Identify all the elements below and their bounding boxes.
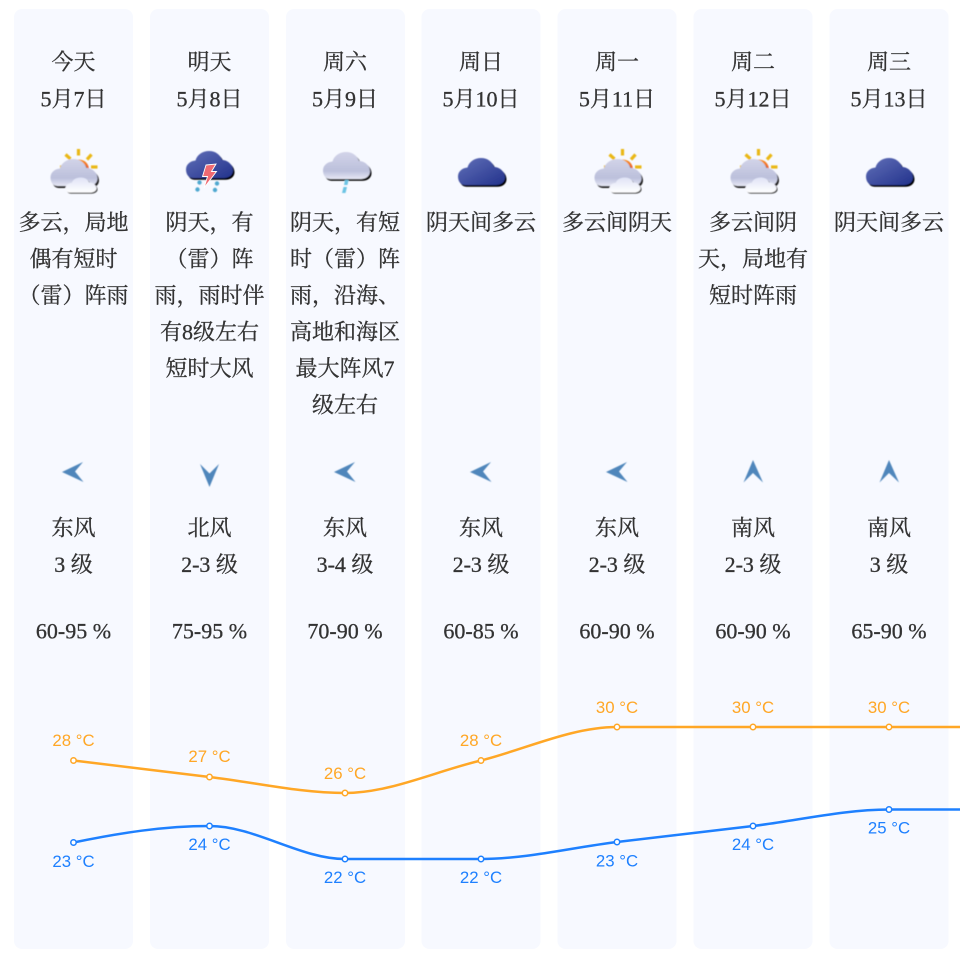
chart: low temperature line: 22 °C bbox=[324, 868, 366, 887]
weather description: 周六: 雨，沿海、 bbox=[290, 283, 400, 309]
icon: thunder shower bbox=[186, 151, 234, 192]
chart: low temperature line: 22 °C bbox=[460, 868, 502, 887]
chart: high temperature line: 28 °C bbox=[52, 731, 95, 750]
chart: high temperature line: 27 °C bbox=[188, 747, 231, 766]
wind arrow: north, day 2 bbox=[200, 464, 219, 487]
weather description: 周二 bbox=[698, 210, 808, 308]
humidity: 今天: 60-95 % bbox=[36, 618, 111, 644]
day heading: 周二 bbox=[714, 50, 792, 112]
wind: 周日 bbox=[453, 516, 509, 577]
wind: 明天 bbox=[181, 516, 238, 577]
day heading: 周一: 周一 bbox=[595, 50, 639, 74]
day heading: 周六 bbox=[312, 50, 378, 112]
humidity: 周一: 60-90 % bbox=[579, 618, 655, 644]
day heading: 明天 bbox=[176, 50, 243, 112]
chart: high temperature line: 26 °C bbox=[324, 764, 366, 783]
weather description: 明天: 阴天，有 bbox=[165, 210, 254, 236]
wind: 周一 bbox=[589, 516, 645, 577]
icon: overcast, day 7 bbox=[866, 158, 914, 187]
day heading: 周二: 5月12日 bbox=[714, 86, 792, 112]
weather description: 周一: 多云间阴天 bbox=[562, 210, 672, 235]
weather description: 明天: （雷）阵 bbox=[165, 246, 254, 272]
wind: 明天: 北风 bbox=[187, 516, 232, 540]
panel: 周一 bbox=[558, 9, 676, 949]
weather description: 周六: 时（雷）阵 bbox=[290, 246, 400, 272]
wind arrow: east, day 3 bbox=[334, 462, 356, 482]
weather description: 周二: 短时阵雨 bbox=[709, 283, 797, 308]
day heading: 明天: 5月8日 bbox=[176, 86, 243, 112]
chart: low temperature line: 23 °C bbox=[596, 851, 638, 870]
weather description: 明天: 短时大风 bbox=[165, 356, 254, 381]
weather description: 今天: 多云，局地 bbox=[18, 210, 129, 236]
panel: 周三 bbox=[830, 9, 948, 949]
weather description: 周三: 阴天间多云 bbox=[834, 210, 944, 235]
wind: 周一: 东风 bbox=[595, 516, 639, 540]
humidity: 周二: 60-90 % bbox=[715, 618, 791, 644]
panel: 周六 bbox=[286, 9, 405, 949]
wind: 周六: 3-4 级 bbox=[317, 552, 373, 577]
day heading: 今天: 5月7日 bbox=[40, 86, 107, 112]
weather description: 周二: 多云间阴 bbox=[709, 210, 797, 235]
weather description: 今天 bbox=[18, 210, 129, 308]
day heading: 周六: 5月9日 bbox=[312, 86, 378, 112]
wind: 今天: 3 级 bbox=[54, 552, 93, 577]
wind: 周三: 南风 bbox=[867, 516, 911, 540]
icon: partly cloudy, day 6 bbox=[730, 149, 779, 194]
wind: 周三: 3 级 bbox=[870, 552, 908, 577]
panel: 明天 bbox=[150, 9, 269, 949]
weather description: 周二: 天，局地有 bbox=[698, 246, 808, 272]
wind arrow: east, day 1 bbox=[62, 462, 84, 482]
day heading: 周一: 5月11日 bbox=[579, 86, 655, 112]
wind arrow: east, day 4 bbox=[470, 462, 492, 482]
chart: low temperature line bbox=[52, 807, 960, 887]
weather description: 周六: 级左右 bbox=[312, 392, 378, 418]
wind: 今天 bbox=[51, 516, 96, 577]
day heading: 周三 bbox=[850, 50, 928, 112]
chart: high temperature line: 30 °C bbox=[732, 698, 774, 717]
day heading: 周六: 周六 bbox=[323, 50, 368, 74]
chart: low temperature line: 25 °C bbox=[868, 818, 910, 837]
weather description: 周日: 阴天间多云 bbox=[426, 210, 536, 235]
weather description: 周六 bbox=[290, 210, 400, 418]
day heading: 周三: 5月13日 bbox=[850, 86, 928, 112]
humidity: 周日: 60-85 % bbox=[443, 618, 519, 644]
weather description: 周六: 高地和海区 bbox=[290, 320, 400, 344]
panel: 今天 bbox=[14, 9, 133, 949]
icon: partly cloudy, day 1 bbox=[50, 149, 99, 194]
day heading: 今天 bbox=[40, 50, 107, 112]
weather description: 明天 bbox=[154, 210, 265, 381]
day heading: 周一 bbox=[579, 50, 655, 112]
day heading: 周三: 周三 bbox=[867, 50, 911, 74]
chart: low temperature line: 23 °C bbox=[52, 852, 95, 871]
wind: 周日: 2-3 级 bbox=[453, 552, 509, 577]
day heading: 周二: 周二 bbox=[731, 50, 775, 74]
wind: 明天: 2-3 级 bbox=[181, 552, 238, 577]
chart: high temperature line: 30 °C bbox=[868, 698, 910, 717]
wind: 周六: 东风 bbox=[323, 516, 367, 540]
panel: 周日 bbox=[422, 9, 540, 949]
chart: low temperature line: 24 °C bbox=[188, 835, 231, 854]
wind arrow: south, day 6 bbox=[744, 460, 763, 482]
panel: 周二 bbox=[694, 9, 812, 949]
wind arrow: south, day 7 bbox=[880, 460, 899, 482]
wind: 周日: 东风 bbox=[459, 516, 503, 540]
weather description: 明天: 有8级左右 bbox=[160, 320, 259, 344]
humidity: 周六: 70-90 % bbox=[307, 618, 383, 644]
chart: high temperature line: 28 °C bbox=[460, 731, 502, 750]
chart: high temperature line: 30 °C bbox=[596, 698, 638, 717]
icon: partly cloudy, day 5 bbox=[594, 149, 643, 194]
weather description: 明天: 雨，雨时伴 bbox=[154, 283, 265, 309]
day heading: 今天: 今天 bbox=[51, 50, 96, 74]
wind: 今天: 东风 bbox=[51, 516, 96, 540]
wind: 周三 bbox=[867, 516, 911, 577]
chart: low temperature line: 24 °C bbox=[732, 835, 774, 854]
chart: high temperature line bbox=[52, 698, 960, 796]
day heading: 周日: 周日 bbox=[459, 50, 503, 74]
wind: 周一: 2-3 级 bbox=[589, 552, 645, 577]
weather description: 今天: （雷）阵雨 bbox=[18, 283, 129, 308]
humidity: 周三: 65-90 % bbox=[851, 618, 927, 644]
day heading: 周日 bbox=[442, 50, 520, 112]
icon: light shower bbox=[323, 152, 372, 193]
icon: overcast, day 4 bbox=[458, 158, 506, 187]
weather description: 周六: 阴天，有短 bbox=[290, 210, 400, 236]
weather description: 周六: 最大阵风7 bbox=[295, 356, 395, 381]
wind: 周六 bbox=[317, 516, 373, 577]
wind arrow: east, day 5 bbox=[606, 462, 628, 482]
wind: 周二: 2-3 级 bbox=[725, 552, 781, 577]
humidity: 明天: 75-95 % bbox=[172, 618, 247, 644]
day heading: 周日: 5月10日 bbox=[442, 86, 520, 112]
day heading: 明天: 明天 bbox=[187, 50, 232, 74]
weather description: 今天: 偶有短时 bbox=[29, 246, 118, 272]
wind: 周二: 南风 bbox=[731, 516, 775, 540]
wind: 周二 bbox=[725, 516, 781, 577]
